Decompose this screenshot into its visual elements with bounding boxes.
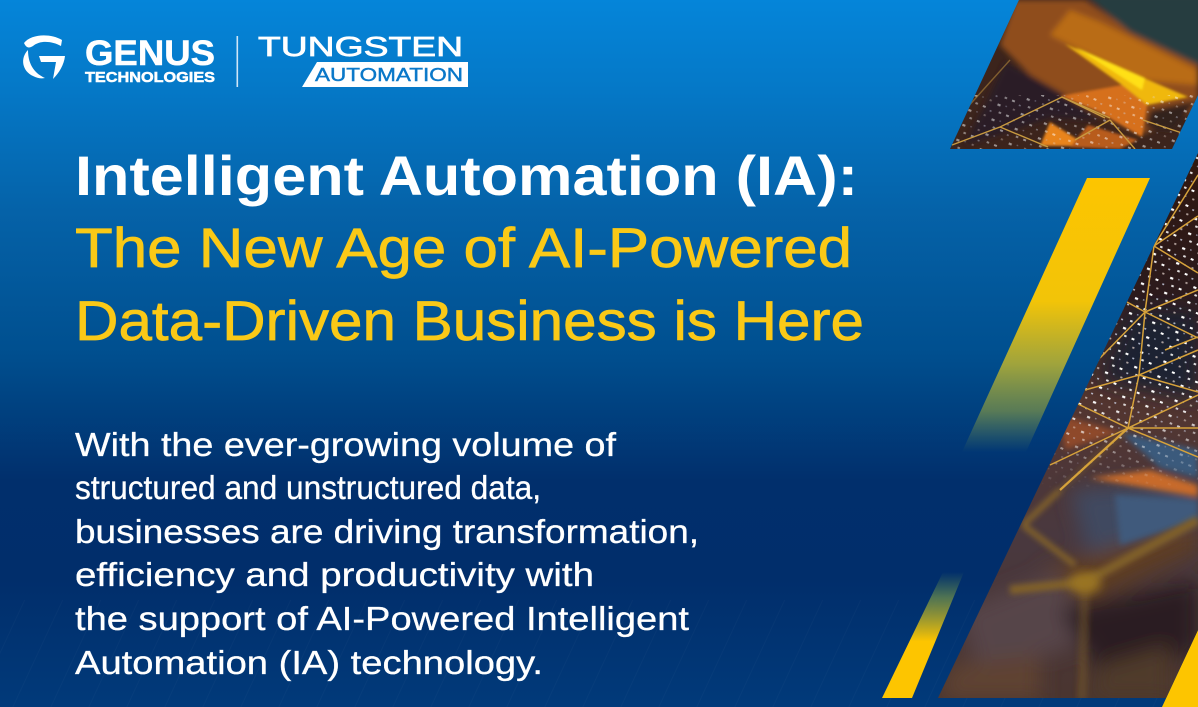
yellow corner bar, bottom right (1162, 630, 1198, 707)
gold network lines (952, 60, 1182, 149)
yellow diagonal bar, lower left (882, 572, 964, 698)
yellow diagonal bar, upper (962, 178, 1150, 452)
title line: yellow 3: Data-Driven Business is Here (75, 289, 864, 352)
logo divider (236, 36, 238, 87)
body paragraph: structured and unstructured data, (75, 469, 541, 506)
title line: yellow 2: The New Age of AI-Powered (75, 216, 852, 279)
bottom diagonal line texture (0, 600, 1198, 707)
Genus wordmark: TECHNOLOGIES (85, 70, 215, 86)
body paragraph: the support of AI-Powered Intelligent (75, 600, 689, 637)
body paragraph (75, 426, 699, 681)
blurred gold strands (1010, 428, 1198, 700)
body paragraph: businesses are driving transformation, (75, 513, 699, 550)
Genus wordmark: GENUS (85, 34, 215, 73)
white data dots (1048, 156, 1198, 486)
Tungsten Automation wordmark (258, 31, 468, 87)
title (75, 144, 864, 352)
blurred lower photo region (940, 310, 1198, 700)
title line: white: Intelligent Automation (IA): (75, 144, 858, 207)
body paragraph: With the ever-growing volume of (75, 426, 617, 463)
body paragraph: Automation (IA) technology. (75, 644, 543, 681)
Tungsten Automation wordmark: TUNGSTEN (258, 31, 463, 62)
Tungsten Automation wordmark: AUTOMATION (315, 65, 463, 85)
logos (23, 31, 468, 87)
body paragraph: efficiency and productivity with (75, 556, 594, 593)
image panel: right data-grid photo (930, 150, 1198, 700)
icon: Genus G mark (23, 35, 65, 79)
gold network lines (1050, 175, 1198, 490)
image panel: top right data-grid photo (940, 0, 1198, 150)
